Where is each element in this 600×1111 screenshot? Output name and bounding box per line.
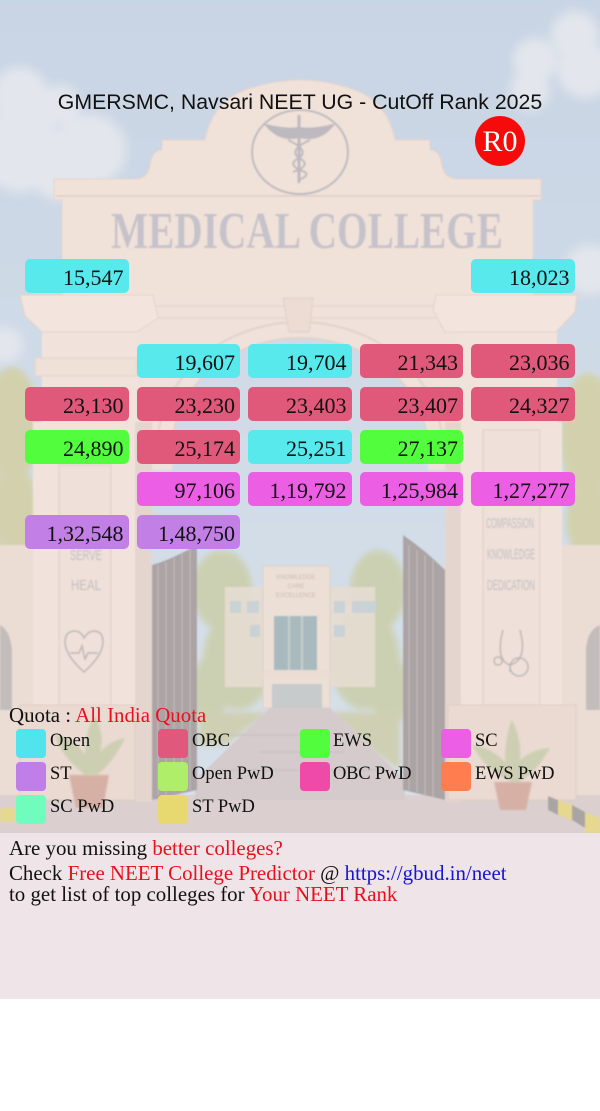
clouds bbox=[0, 11, 600, 363]
iron gates bbox=[152, 545, 197, 800]
chip 21,343 bbox=[360, 344, 463, 378]
chip 23,407: 23,407 bbox=[398, 393, 458, 418]
kerb stripes bbox=[558, 800, 600, 833]
chip 23,403 bbox=[248, 387, 352, 421]
legend swatch: SC bbox=[441, 729, 471, 758]
chip 23,130: 23,130 bbox=[63, 393, 124, 418]
potted plants bbox=[55, 716, 550, 810]
chip 23,036 bbox=[471, 344, 574, 378]
legend swatch: OBC PwD bbox=[300, 762, 330, 791]
chip 1,32,548: 1,32,548 bbox=[46, 520, 124, 546]
chip 27,137 bbox=[360, 430, 463, 464]
legend label: SC PwD: SC PwD bbox=[50, 797, 114, 817]
chip 24,890: 24,890 bbox=[63, 436, 124, 460]
right pillar: COMPASSION bbox=[486, 515, 534, 532]
chip 27,137: 27,137 bbox=[398, 436, 458, 460]
chip 1,25,984: 1,25,984 bbox=[381, 478, 458, 503]
trees behind the gate bbox=[192, 550, 410, 725]
round badge R0 bbox=[475, 116, 525, 166]
rank chips grid bbox=[25, 259, 575, 549]
legend label: ST: ST bbox=[50, 764, 72, 784]
icon: stethoscope bbox=[494, 630, 528, 676]
legend label: Open: Open bbox=[50, 731, 90, 751]
icon: heart bbox=[65, 631, 103, 672]
chip 23,230: 23,230 bbox=[174, 393, 235, 418]
left pillar: HEAL bbox=[71, 577, 101, 594]
footer panel background bbox=[0, 833, 600, 999]
chip 97,106 bbox=[136, 472, 240, 506]
promo line 2: Check Free NEET College Predictor @ https://gbud.in/neet bbox=[9, 861, 507, 885]
round badge R0: R0 bbox=[482, 125, 518, 158]
legend swatch: OBC bbox=[158, 729, 188, 758]
chip 97,106: 97,106 bbox=[174, 478, 235, 503]
chip 25,251: 25,251 bbox=[286, 436, 346, 460]
legend label: ST PwD: ST PwD bbox=[192, 797, 255, 817]
left pillar: SERVE bbox=[70, 547, 102, 564]
chip 19,607 bbox=[136, 344, 240, 378]
hedges along the road bbox=[198, 712, 400, 770]
chip 18,023: 18,023 bbox=[509, 265, 570, 290]
legend swatch: ST bbox=[16, 762, 46, 791]
right pillar bbox=[433, 295, 577, 802]
legend label: EWS PwD: EWS PwD bbox=[475, 764, 554, 784]
gate top wall and crest bbox=[54, 80, 541, 300]
chip 19,607: 19,607 bbox=[174, 350, 235, 375]
chip 25,174: 25,174 bbox=[174, 436, 235, 460]
chip 19,704: 19,704 bbox=[286, 350, 346, 375]
chip 25,174 bbox=[136, 430, 240, 464]
chip 23,407 bbox=[360, 387, 463, 421]
trees at the sides bbox=[0, 367, 600, 560]
legend swatch: Open PwD bbox=[158, 762, 188, 791]
chip 24,327: 24,327 bbox=[509, 393, 570, 418]
legend label: EWS: EWS bbox=[333, 731, 372, 751]
promo line 3: to get list of top colleges for Your NEET Rank bbox=[9, 882, 397, 906]
legend swatch: Open bbox=[16, 729, 46, 758]
chip 23,036: 23,036 bbox=[509, 350, 570, 375]
chip 1,19,792: 1,19,792 bbox=[270, 478, 346, 503]
legend swatch: ST PwD bbox=[158, 795, 188, 824]
legend label: Open PwD: Open PwD bbox=[192, 764, 274, 784]
chip 24,890 bbox=[25, 430, 128, 464]
chip 18,023 bbox=[471, 259, 574, 293]
distant building: KNOWLEDGE bbox=[276, 575, 316, 581]
chip 25,251 bbox=[248, 430, 352, 464]
chip 1,48,750: 1,48,750 bbox=[158, 520, 235, 546]
distant building: EXCELLENCE bbox=[276, 593, 316, 599]
title: GMERSMC, Navsari NEET UG - CutOff Rank 2025 bbox=[58, 90, 542, 114]
legend swatch: EWS PwD bbox=[441, 762, 471, 791]
chip 1,32,548 bbox=[25, 514, 128, 548]
legend bbox=[16, 729, 554, 824]
chip 1,27,277: 1,27,277 bbox=[492, 478, 570, 503]
legend label: OBC PwD: OBC PwD bbox=[333, 764, 411, 784]
left pillar bbox=[20, 295, 158, 802]
chip 21,343: 21,343 bbox=[398, 350, 458, 375]
distant building: CARE bbox=[288, 584, 304, 590]
driveway bbox=[0, 795, 600, 840]
chip 1,25,984 bbox=[360, 472, 463, 506]
chip 23,230 bbox=[136, 387, 240, 421]
chip 24,327 bbox=[471, 387, 574, 421]
right pillar: KNOWLEDGE bbox=[487, 546, 535, 563]
chip 23,403: 23,403 bbox=[286, 393, 346, 418]
legend label: SC: SC bbox=[475, 731, 498, 751]
chip 19,704 bbox=[248, 344, 352, 378]
distant building bbox=[225, 566, 376, 708]
background illustration: medical college gate bbox=[0, 0, 600, 833]
chip 23,130 bbox=[25, 387, 128, 421]
quota heading: Quota : All India Quota bbox=[9, 703, 206, 727]
legend swatch: EWS bbox=[300, 729, 330, 758]
sky bbox=[0, 0, 600, 870]
legend swatch: SC PwD bbox=[16, 795, 46, 824]
caduceus emblem bbox=[252, 110, 348, 194]
side walls bbox=[0, 545, 35, 795]
chip 15,547: 15,547 bbox=[63, 265, 124, 290]
chip 1,48,750 bbox=[136, 514, 240, 548]
chip 15,547 bbox=[25, 259, 128, 293]
promo line 1: Are you missing better colleges? bbox=[9, 836, 283, 860]
chip 1,27,277 bbox=[471, 472, 574, 506]
chip 1,19,792 bbox=[248, 472, 352, 506]
right pillar: DEDICATION bbox=[487, 577, 535, 594]
arch lintel bbox=[137, 298, 460, 470]
legend label: OBC: OBC bbox=[192, 731, 230, 751]
